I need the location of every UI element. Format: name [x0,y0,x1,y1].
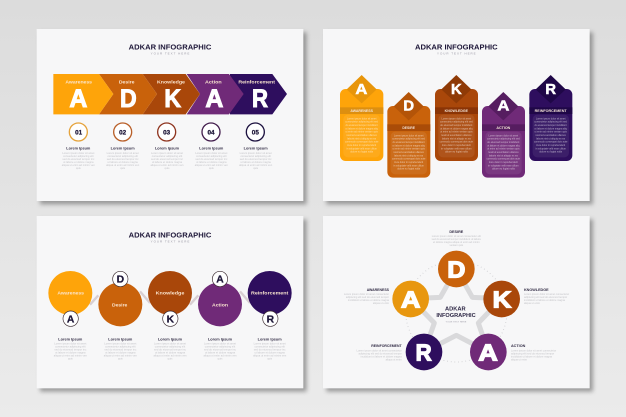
circle: desire [98,271,142,326]
card: awareness: irure dolor in reprehenderit [347,144,376,147]
step 04 [195,123,228,170]
card: reinforcement: R [545,82,556,98]
card: action: ACTION [496,126,511,130]
text block 1: consectetur adipiscing elit [55,345,86,349]
text block 1: Lorem Ipsum [58,337,83,341]
step 03: Lorem Ipsum [155,146,180,150]
label: awareness: Lorem ipsum dolor sit amet consectetur [344,292,389,296]
step 01: aliqua ut enim ad minim ven [62,163,95,167]
card: desire: commodo consequat duis aute [392,158,426,161]
card: desire: Lorem ipsum dolor sit amet [394,134,424,137]
step 01: quis [76,166,81,170]
step 05: quis [253,166,259,170]
label: reinforcement: adipiscing elit sed do eiusmod tempor [359,351,402,355]
center title [436,306,476,323]
card: action [482,92,525,178]
card: awareness: Lorem ipsum dolor sit amet [347,117,377,120]
card: desire: in voluptate velit esse cillum [393,164,424,167]
card: reinforcement: irure dolor in reprehenderit [536,144,565,147]
card: knowledge: consectetur adipiscing elit sed [440,121,473,124]
text block 5: ut labore et dolore magna [255,351,285,355]
node: A action: A [478,339,498,365]
card: action: in voluptate velit esse cillum [488,164,519,167]
card: desire: nostrud exercitation ullamco [393,151,425,154]
text block 1: ut labore et dolore magna [55,351,86,355]
card: knowledge: ut labore et dolore magna aliq [440,127,473,130]
step 01: Lorem Ipsum [66,146,91,150]
card: action: Lorem ipsum dolor sit amet [489,134,518,137]
card: knowledge: KNOWLEDGE [445,109,469,113]
step 02: ut labore et dolore magna [108,160,138,164]
arrow: desire: Desire [119,80,135,86]
text block 5: consectetur adipiscing elit [254,345,285,349]
step 03: ut labore et dolore magna [152,160,183,164]
label: action [511,344,556,361]
step 04: 04 [207,129,215,136]
text block 3: quis [168,357,173,361]
step 01: ut labore et dolore magna [63,160,94,164]
step 05: ut labore et dolore magna [241,160,271,164]
text block 3: aliqua ut enim ad minim ven [153,354,187,358]
label: desire: DESIRE [449,230,464,234]
label: awareness: AWARENESS [367,288,390,292]
step 05: aliqua ut enim ad minim ven [239,163,273,167]
step 04: quis [209,166,214,170]
step 03: sed do eiusmod tempor inc [151,157,184,161]
arrow: knowledge: Knowledge [157,80,185,86]
step 02: Lorem ipsum dolor sit amet [107,151,139,155]
card: action: ut enim ad minim veniam quis [487,148,520,151]
subtitle: YOUR TEXT HERE [437,52,476,56]
circle: desire: Desire [112,303,128,309]
label: awareness: aliqua ut enim [373,301,389,305]
card: awareness: ut labore et dolore magna aliq [345,127,379,130]
arrow: reinforcement: R [252,86,268,113]
connecting wave [90,291,250,305]
label: awareness: incididunt ut labore et dolore magna [348,298,390,302]
arrow: knowledge: K [164,86,181,113]
card: knowledge: irure dolor in reprehenderit [442,144,471,147]
center title: INFOGRAPHIC [436,313,476,319]
step 05: sed do eiusmod tempor inc [240,157,272,161]
card: reinforcement: Lorem ipsum dolor sit amet [536,117,566,120]
label: awareness [344,288,390,305]
circle: reinforcement [248,271,292,326]
text block 2: consectetur adipiscing elit [105,345,136,349]
label: desire: veniam quis [449,243,464,247]
arrow: awareness: Awareness [65,80,92,86]
card: awareness: consectetur adipiscing elit sed [345,121,379,124]
card: awareness: A [355,82,368,98]
card: action: dolore eu fugiat nulla [492,168,515,171]
label: desire [432,230,482,247]
label: action: incididunt ut labore et dolore magna [511,354,553,358]
step 03: Lorem ipsum dolor sit amet [151,151,183,155]
step 01: consectetur adipiscing elit [63,154,94,158]
step 04: consectetur adipiscing elit [196,154,227,158]
arrow: awareness: A [69,86,88,113]
node: A awareness: A [401,286,420,312]
node: R: R [416,339,432,365]
label: action: adipiscing elit sed do eiusmod tempor [511,351,554,355]
text block 5: aliqua ut enim ad minim ven [253,354,287,358]
card: desire: laboris nisi ut aliquip ex ea [394,154,424,157]
circle: desire: D [117,275,125,286]
label: knowledge: aliqua ut enim [524,301,540,305]
card: reinforcement [529,75,572,161]
arrow: reinforcement [230,74,287,114]
step 02: sed do eiusmod tempor inc [107,157,139,161]
card: reinforcement: commodo consequat duis aute [534,141,568,144]
label: reinforcement: aliqua ut enim [386,357,402,361]
card: action: ut labore et dolore magna aliq [487,144,520,147]
arrow: desire: D [120,86,137,113]
text block 1: Lorem ipsum dolor sit amet [54,342,87,346]
center title: ADKAR [445,306,466,312]
node: D: D [447,256,465,282]
step 02: quis [120,166,126,170]
card: awareness: laboris nisi ut aliquip ex ea [347,137,377,140]
step 04: aliqua ut enim ad minim ven [195,163,228,167]
card: knowledge: do eiusmod tempor incididunt [440,124,473,127]
card: awareness: AWARENESS [350,109,374,113]
card: knowledge: dolore eu fugiat nulla [445,151,468,154]
card: awareness: do eiusmod tempor incididunt [346,124,378,127]
step 02: consectetur adipiscing elit [107,154,138,158]
card: knowledge: Lorem ipsum dolor sit amet [442,117,471,120]
circle: knowledge: K [167,314,175,325]
panel: arrow chevrons [37,29,307,204]
step 05: consectetur adipiscing elit [240,154,271,158]
star connector [411,269,502,352]
card: desire: irure dolor in reprehenderit [394,161,423,164]
text block 1: aliqua ut enim ad minim ven [54,354,87,358]
heading: ADKAR INFOGRAPHIC [129,230,212,239]
arrow: action: Action [205,80,222,86]
step 02: aliqua ut enim ad minim ven [106,163,140,167]
card: action: irure dolor in reprehenderit [489,161,518,164]
card: desire: DESIRE [402,126,416,130]
text block 3: ut labore et dolore magna [155,351,186,355]
card: action: laboris nisi ut aliquip ex ea [489,154,518,157]
center title: YOUR TEXT HERE [446,321,467,323]
card: reinforcement: ut labore et dolore magna aliq [534,127,568,130]
circle: action: A [216,275,224,286]
step 01: Lorem ipsum dolor sit amet [62,151,95,155]
arrow: desire [99,74,157,114]
text block 5: Lorem Ipsum [258,337,282,341]
label: action: aliqua ut enim [511,357,527,361]
card: knowledge [435,75,478,161]
step 03: quis [165,166,170,170]
arrow: knowledge [143,74,200,114]
card: reinforcement: ut enim ad minim veniam quis [534,131,568,134]
step 03: 03 [163,129,171,136]
card: knowledge: commodo consequat duis aute [440,141,474,144]
circle: awareness: A [67,314,75,325]
panel: pentagon cycle [323,216,593,392]
text block 2: sed do eiusmod tempor inc [104,348,137,352]
card: desire [387,92,430,178]
circle: reinforcement: Reinforcement [251,291,289,297]
label: knowledge [524,288,569,305]
text block 2: ut labore et dolore magna [105,351,136,355]
node: A action [470,334,507,370]
text block 5: quis [267,357,273,361]
card: action: consectetur adipiscing elit sed [487,138,520,141]
label: reinforcement: REINFORCEMENT [371,344,403,348]
step 04: Lorem ipsum dolor sit amet [195,151,228,155]
text block 4: consectetur adipiscing elit [205,345,235,349]
text block 4: quis [218,357,223,361]
text block 1 [54,337,87,361]
card: desire: dolore eu fugiat nulla [397,168,421,171]
card: action: commodo consequat duis aute [487,158,521,161]
step 03: aliqua ut enim ad minim ven [150,163,184,167]
node: K: K [493,286,511,312]
card: knowledge: ut enim ad minim veniam quis [440,131,473,134]
label: desire: et dolore magna aliqua ut enim ad minim [433,240,480,244]
text block 5 [253,337,287,361]
card: knowledge: in voluptate velit esse cillum [441,147,472,150]
circle: knowledge [148,271,192,326]
card: action: do eiusmod tempor incididunt [487,141,520,144]
circle: reinforcement: R [267,314,275,325]
circle: action [198,271,242,326]
label: reinforcement: incididunt ut labore et dolore magna [361,354,402,358]
card: knowledge: nostrud exercitation ullamco [441,134,472,137]
arrow: reinforcement: Reinforcement [238,80,275,86]
card: reinforcement: in voluptate velit esse cillum [535,147,566,150]
text block 1: sed do eiusmod tempor inc [54,348,87,352]
card: reinforcement: REINFORCEMENT [535,109,568,113]
circle: action: Action [212,303,228,309]
label: desire: Lorem ipsum dolor sit amet consectetur elit [432,234,481,238]
text block 4: Lorem ipsum dolor sit amet [204,342,236,346]
step 04: sed do eiusmod tempor inc [195,157,228,161]
card: awareness [340,75,383,161]
dotted ring [406,261,507,362]
card: action: A [497,99,510,115]
step 03 [150,123,184,170]
step 02: 02 [119,129,127,136]
text block 2: aliqua ut enim ad minim ven [104,354,137,358]
step 02: Lorem Ipsum [111,146,135,150]
subtitle: YOUR TEXT HERE [151,240,189,244]
label: knowledge: Lorem ipsum dolor sit amet consectetur [524,292,569,296]
step 04: Lorem Ipsum [199,146,224,150]
text block 3: Lorem Ipsum [158,337,183,341]
card: reinforcement: do eiusmod tempor incididunt [535,124,567,127]
label: action: ACTION [511,344,526,348]
text block 3 [153,337,187,361]
card: knowledge: K [451,82,462,98]
card: desire: consectetur adipiscing elit sed [392,138,426,141]
text block 4: Lorem Ipsum [208,337,233,341]
card: reinforcement: dolore eu fugiat nulla [539,151,563,154]
label: reinforcement [357,344,403,361]
panel: overlapping circles [37,216,307,392]
text block 1: quis [68,357,73,361]
arrow: action [187,74,244,114]
text block 2 [104,337,137,361]
label: knowledge: incididunt ut labore et dolore magna [524,298,566,302]
label: desire: sed do eiusmod tempor incididunt ut labore [432,237,482,241]
label: action: Lorem ipsum dolor sit amet consectetur [511,348,556,352]
card: reinforcement: nostrud exercitation ullamco [535,134,567,137]
step 01: 01 [75,129,83,136]
step 03: consectetur adipiscing elit [152,154,182,158]
step 05: Lorem ipsum dolor sit amet [240,151,272,155]
node: D [438,251,475,287]
step 05 [239,123,273,170]
text block 2: Lorem ipsum dolor sit amet [104,342,137,346]
text block 2: quis [118,357,123,361]
circle: awareness: Awareness [57,291,84,297]
text block 4: ut labore et dolore magna [205,351,236,355]
card: reinforcement: laboris nisi ut aliquip ex ea [536,137,566,140]
label: knowledge: KNOWLEDGE [524,288,549,292]
card: awareness: in voluptate velit esse cillum [346,147,377,150]
card: awareness: dolore eu fugiat nulla [350,151,374,154]
node: K [483,281,520,317]
card: desire: D [403,99,414,115]
step 04: ut labore et dolore magna [196,160,227,164]
card: action: nostrud exercitation ullamco [488,151,519,154]
circle: awareness [48,271,92,326]
card: awareness: nostrud exercitation ullamco [346,134,378,137]
subtitle: YOUR TEXT HERE [151,52,189,56]
text block 4: aliqua ut enim ad minim ven [203,354,237,358]
text block 5: Lorem ipsum dolor sit amet [254,342,286,346]
step 05: Lorem Ipsum [244,146,268,150]
card: knowledge: laboris nisi ut aliquip ex ea [442,137,471,140]
heading: ADKAR INFOGRAPHIC [415,42,498,51]
text block 4: sed do eiusmod tempor inc [204,348,237,352]
text block 2: Lorem Ipsum [108,337,133,341]
step 01 [62,123,95,170]
label: reinforcement: Lorem ipsum dolor sit amet consectetur [357,348,402,352]
heading: ADKAR INFOGRAPHIC [129,42,212,51]
node: R [406,334,442,370]
arrow: awareness [53,74,113,114]
arrow: action: A [205,86,224,113]
card: desire: do eiusmod tempor incididunt [393,141,425,144]
step 05: 05 [252,129,259,136]
step 01: sed do eiusmod tempor inc [62,157,95,161]
text block 3: sed do eiusmod tempor inc [154,348,187,352]
text block 3: Lorem ipsum dolor sit amet [154,342,186,346]
card: awareness: commodo consequat duis aute [345,141,379,144]
text block 5: sed do eiusmod tempor inc [254,348,286,352]
card: reinforcement: consectetur adipiscing elit sed [534,121,568,124]
text block 4 [203,337,237,361]
card: desire: ut labore et dolore magna aliq [392,144,426,147]
node: A awareness [392,281,429,317]
label: awareness: adipiscing elit sed do eiusmod tempor [346,295,389,299]
text block 3: consectetur adipiscing elit [155,345,185,349]
card: awareness: ut enim ad minim veniam quis [345,131,379,134]
panel: label cards [323,29,593,204]
circle: knowledge: Knowledge [156,291,185,297]
step 02 [106,123,140,170]
card: desire: ut enim ad minim veniam quis [392,148,426,151]
label: knowledge: adipiscing elit sed do eiusmod tempor [524,295,567,299]
